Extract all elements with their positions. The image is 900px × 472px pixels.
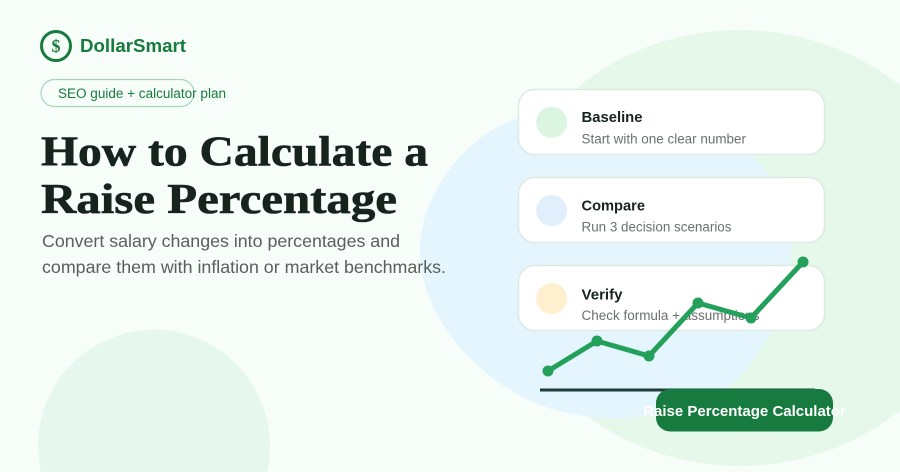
panel: baseline card [518, 90, 824, 154]
chart baseline axis [540, 388, 815, 392]
title: How to Calculate a [41, 130, 428, 176]
tag pill: SEO guide + calculator plan [58, 86, 226, 101]
brand name: DollarSmart [80, 35, 186, 56]
subtitle [42, 231, 446, 277]
logo [42, 32, 186, 60]
title: Raise Percentage [41, 177, 397, 223]
panel: compare card [518, 178, 824, 242]
icon: dollar coin: $ [52, 36, 60, 56]
subtitle: compare them with inflation or market benchmarks. [42, 257, 446, 277]
panel: compare card: Compare [582, 199, 645, 215]
blue background blob [420, 109, 791, 418]
icon: dollar coin [42, 32, 70, 60]
bottom-left circle [38, 330, 270, 472]
panel: baseline card: Baseline [582, 110, 642, 126]
call-to-action button: Raise Percentage Calculator [643, 403, 846, 420]
subtitle: Convert salary changes into percentages and [42, 231, 400, 251]
tag pill [41, 80, 226, 106]
panel: verify card: Check formula + assumptions [582, 308, 760, 323]
green background blob [500, 30, 900, 466]
panel: baseline card: Start with one clear number [582, 131, 746, 146]
panel: verify card: Verify [582, 287, 623, 303]
line chart [542, 256, 808, 376]
call-to-action button [643, 389, 846, 432]
title [41, 130, 428, 223]
panel: compare card: Run 3 decision scenarios [582, 220, 732, 235]
panel: verify card [518, 266, 824, 330]
